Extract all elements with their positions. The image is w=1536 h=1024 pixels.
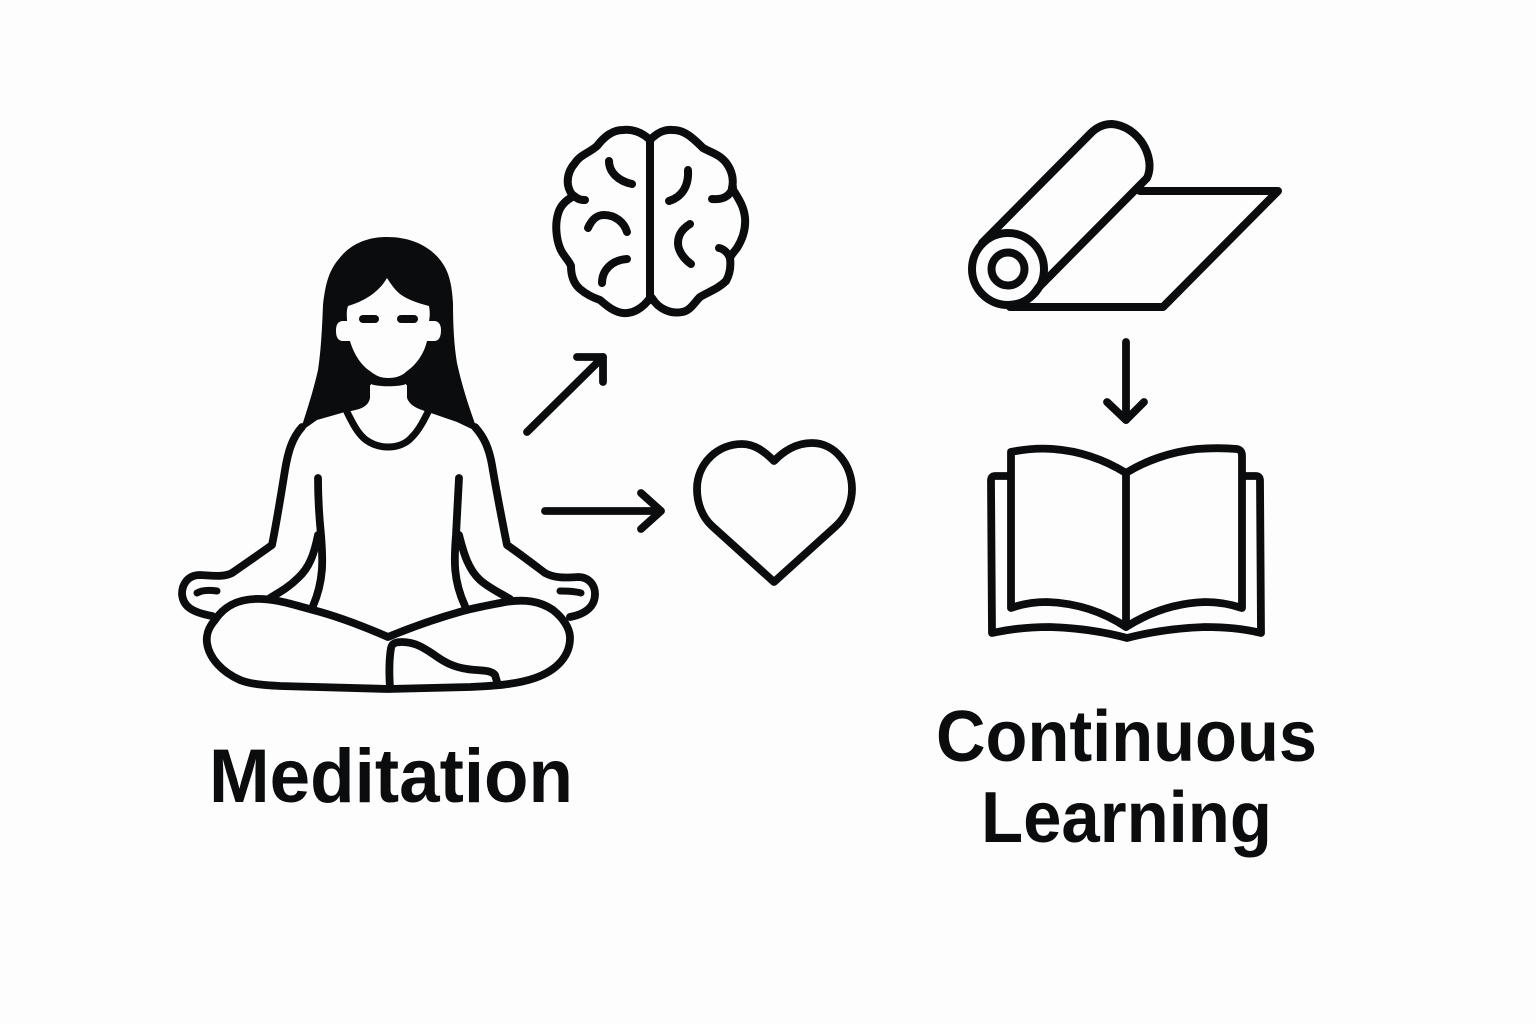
icon: heart xyxy=(697,443,852,582)
crossed legs xyxy=(207,599,570,689)
inner arm left xyxy=(313,478,322,606)
eyes xyxy=(363,315,414,323)
arrow: meditation to heart xyxy=(545,493,661,529)
label: Meditation: Meditation xyxy=(209,734,573,819)
hand marks xyxy=(197,590,217,593)
icon: meditating woman xyxy=(182,237,595,689)
foot xyxy=(389,642,498,688)
inner arm right xyxy=(455,478,465,606)
arrow: mat to book xyxy=(1107,342,1144,420)
torso and arms xyxy=(182,427,302,616)
label: Continuous Learning: Continuous xyxy=(936,697,1317,777)
label: Continuous Learning xyxy=(936,697,1317,858)
icon: open book xyxy=(991,448,1261,638)
collar xyxy=(347,412,428,447)
face xyxy=(336,278,441,378)
neck xyxy=(345,384,430,448)
hair xyxy=(300,237,478,432)
icon: rolled yoga mat xyxy=(972,124,1278,307)
icon: brain xyxy=(556,130,745,313)
arrow: meditation to brain xyxy=(527,357,603,432)
chin band xyxy=(368,368,409,388)
label: Continuous Learning: Learning xyxy=(981,778,1272,858)
